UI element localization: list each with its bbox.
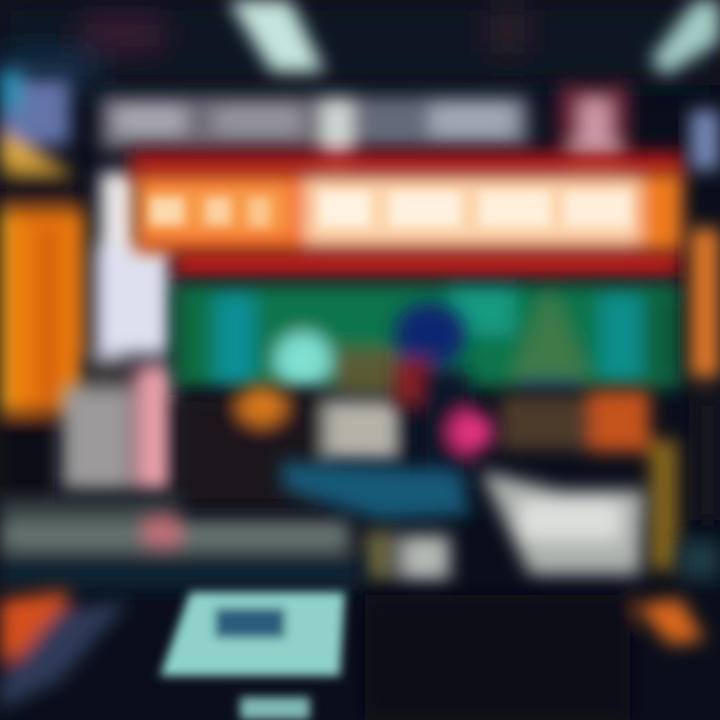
bottom right items xyxy=(365,595,705,720)
lower shelves xyxy=(175,385,678,570)
left shop display xyxy=(0,70,85,513)
teal screen xyxy=(160,592,345,720)
white counter items xyxy=(365,470,645,580)
white column xyxy=(62,172,173,490)
figure xyxy=(394,303,494,490)
green display wall xyxy=(175,284,680,395)
ceiling lights xyxy=(228,0,720,76)
upper sign band xyxy=(100,85,630,165)
desk xyxy=(280,462,470,520)
bottom left items xyxy=(0,590,130,710)
orange banner xyxy=(135,172,683,252)
ceiling xyxy=(0,0,720,85)
right edge xyxy=(690,110,720,520)
red bands xyxy=(130,152,685,278)
banner lettering shapes xyxy=(150,192,630,227)
counter xyxy=(0,498,720,590)
